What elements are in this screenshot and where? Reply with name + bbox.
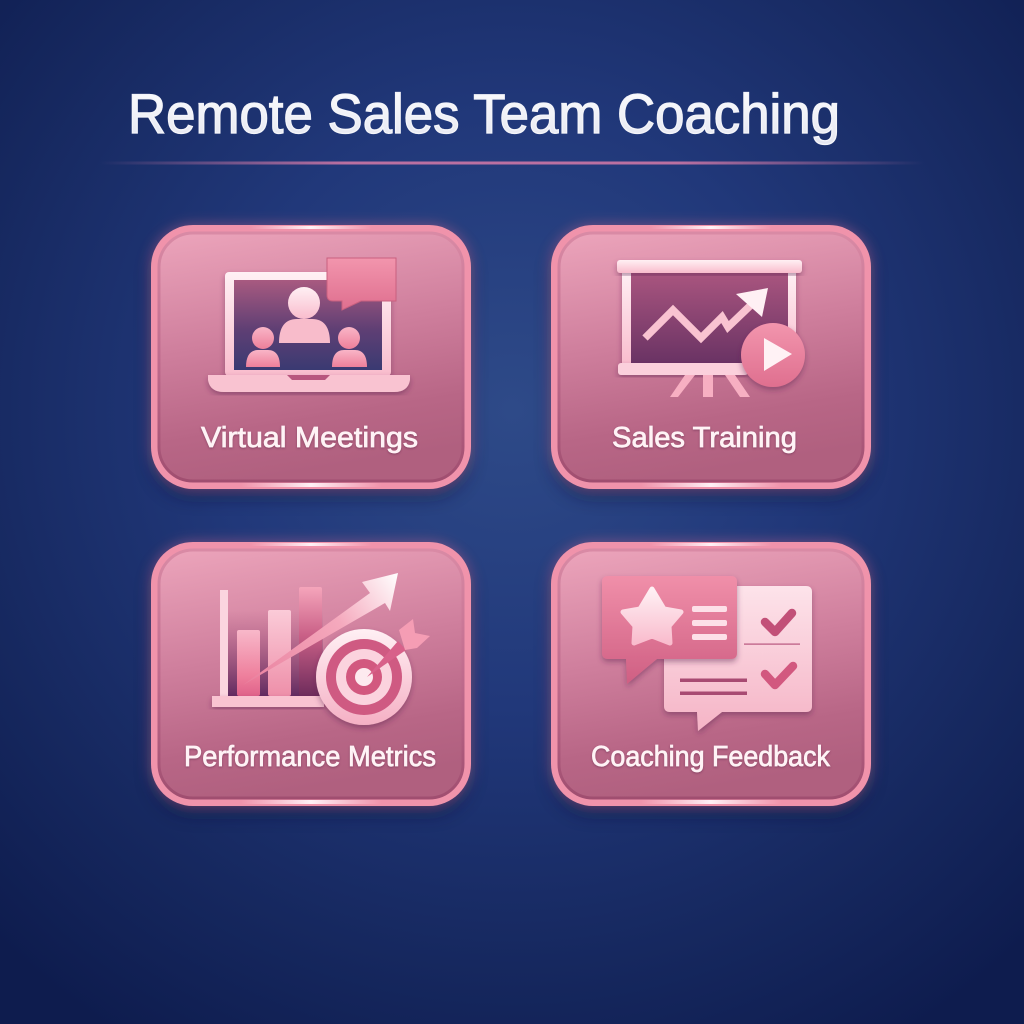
title: Remote Sales Team Coaching	[128, 82, 840, 145]
icon: bar chart	[212, 573, 398, 707]
icon: star	[623, 589, 681, 643]
icon: presentation board	[617, 260, 805, 397]
label: Coaching Feedback	[591, 741, 830, 773]
icon: right person	[332, 327, 367, 367]
icon: star review bubble	[602, 576, 737, 684]
label: Performance Metrics	[184, 741, 436, 773]
icon: laptop video call	[208, 258, 410, 392]
label: Virtual Meetings	[201, 422, 418, 454]
icon: center person	[279, 287, 330, 343]
panel: performance metrics	[151, 542, 471, 813]
panel: sales training	[551, 225, 871, 496]
panel: coaching feedback	[551, 542, 871, 813]
icon: laptop base	[208, 375, 410, 392]
label: Sales Training	[612, 422, 797, 454]
icon: target with dart	[316, 619, 430, 725]
icon: left person	[246, 327, 280, 367]
icon: check marks	[765, 613, 793, 685]
icon: play button	[741, 323, 805, 387]
icon: speech bubble	[327, 258, 396, 310]
icon: checklist bubble	[664, 586, 812, 731]
icon: rising arrow	[243, 573, 398, 685]
panel: virtual meetings	[151, 225, 471, 496]
icon: trend line arrow	[645, 288, 768, 338]
